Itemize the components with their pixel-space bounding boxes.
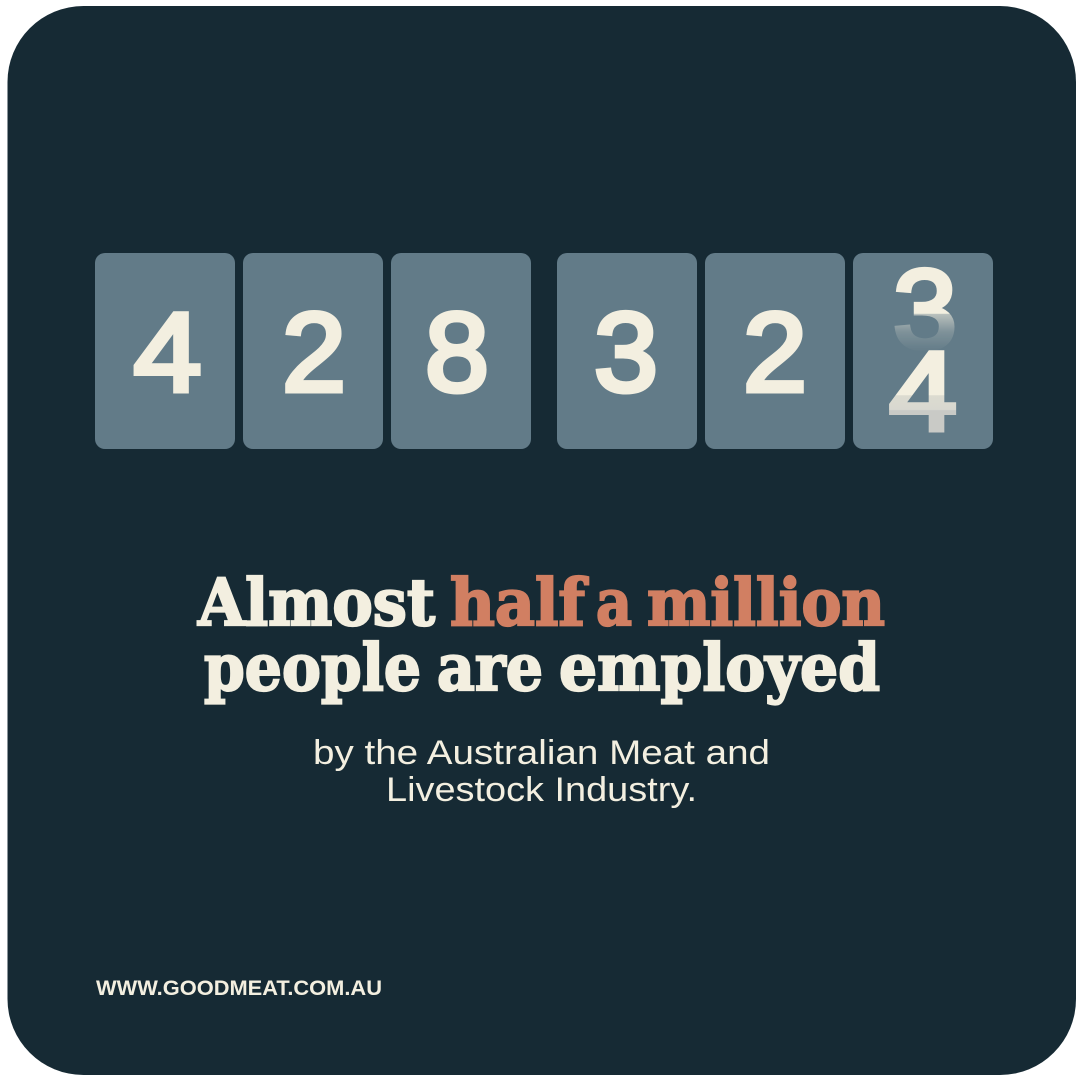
digit tile: 2: 2	[282, 290, 346, 415]
digit tile: 4: 4	[134, 290, 202, 415]
digit tile: 3: 3	[594, 290, 658, 415]
subtitle: Livestock Industry.	[386, 771, 697, 809]
digit tile: rolling 3 and 4: 4	[889, 329, 957, 454]
digit tile: 3	[557, 253, 697, 449]
digit tile: rolling 3 and 4	[853, 247, 993, 454]
headline line 2: people	[204, 630, 421, 706]
digit tile: 8	[391, 253, 531, 449]
headline line 1	[197, 565, 885, 641]
headline line 2: are	[437, 630, 543, 706]
headline line 1: a	[596, 565, 632, 641]
subtitle: by the Australian Meat and	[313, 734, 770, 772]
number counter	[95, 247, 993, 454]
headline line 1: half	[450, 565, 589, 641]
subtitle	[313, 734, 770, 809]
headline line 1: Almost	[197, 565, 435, 641]
headline	[197, 565, 885, 706]
digit tile: 2	[243, 253, 383, 449]
website url: WWW.GOODMEAT.COM.AU	[96, 977, 382, 1000]
digit tile: rolling 3 and 4: 3	[893, 247, 957, 372]
digit tile: 8: 8	[425, 290, 489, 415]
digit tile: 4	[95, 253, 235, 449]
headline line 2: employed	[559, 630, 880, 706]
digit tile: 2: 2	[743, 290, 807, 415]
digit tile: 2	[705, 253, 845, 449]
headline line 1: million	[647, 565, 885, 641]
headline line 2	[204, 630, 880, 706]
